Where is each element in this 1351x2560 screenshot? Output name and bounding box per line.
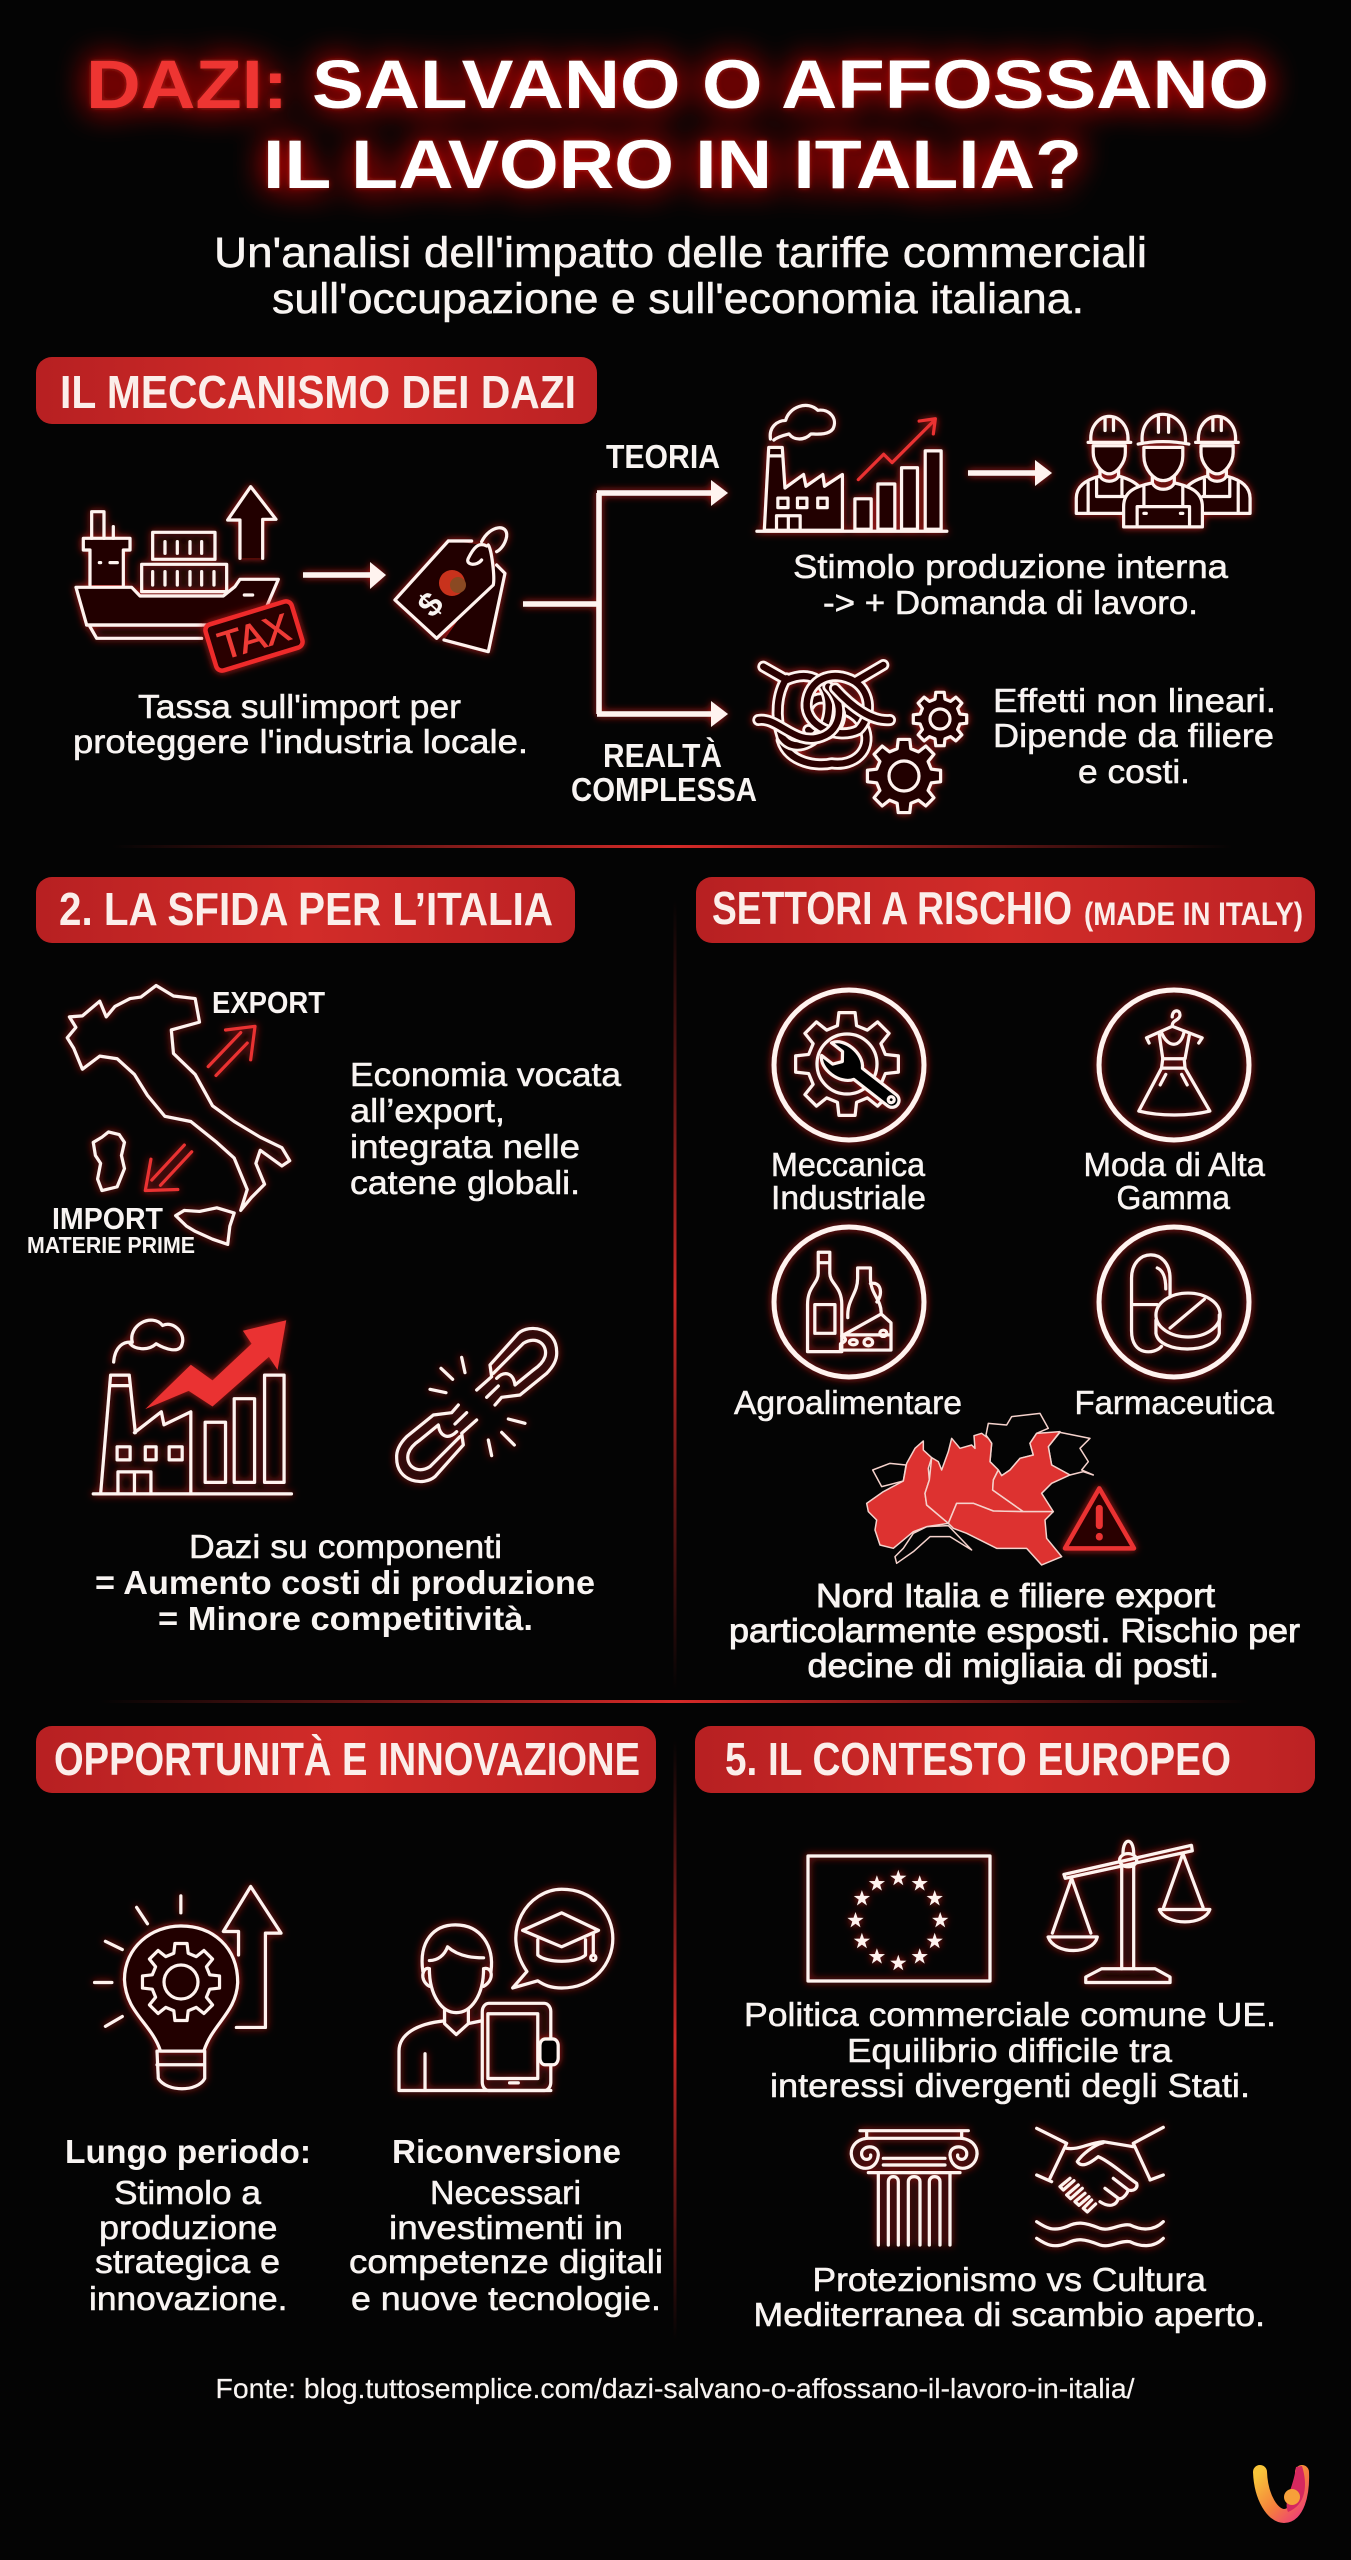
- text: economia vocata: integrata nelle: [350, 1128, 580, 1165]
- title: SALVANO O AFFOSSANO: [312, 46, 1269, 123]
- text: dazi su componenti: [95, 1528, 595, 1637]
- logo: [1260, 2466, 1305, 2516]
- icon: greek column: [851, 2131, 977, 2245]
- label: realtà complessa: REALTÀ: [603, 737, 722, 774]
- label: import materie prime: MATERIE PRIME: [27, 1232, 195, 1258]
- text: dazi su componenti: = Minore competitività.: [158, 1600, 533, 1637]
- icon: tax stamp: TAX: [213, 606, 296, 669]
- icon: balance scale: [1048, 1841, 1210, 1982]
- icon: pills: [1099, 1227, 1249, 1377]
- text: economia vocata: all’export,: [350, 1092, 505, 1129]
- map: northern italy regions: [867, 1413, 1093, 1565]
- label: meccanica industriale: [771, 1146, 926, 1216]
- icon: warning triangle: [1065, 1488, 1134, 1548]
- heading: opportunità e innovazione: OPPORTUNITÀ E INNOVAZIONE: [54, 1733, 640, 1785]
- text: economia vocata: Economia vocata: [350, 1056, 622, 1093]
- label: moda di alta gamma: Gamma: [1116, 1179, 1231, 1216]
- title: DAZI:: [86, 46, 288, 123]
- icon: broken chain: [397, 1328, 557, 1482]
- subtitle: Un'analisi dell'impatto delle tariffe commerciali: [214, 229, 1147, 277]
- text: stimolo produzione: -> + Domanda di lavoro.: [823, 584, 1198, 621]
- label: realtà complessa: COMPLESSA: [571, 771, 757, 808]
- text: lungo periodo: Lungo periodo:: [65, 2133, 311, 2170]
- text: protezionismo: Protezionismo vs Cultura: [812, 2261, 1207, 2298]
- text: riconversione: Riconversione: [392, 2133, 621, 2170]
- label: meccanica industriale: Meccanica: [771, 1146, 926, 1183]
- arrow: factory to workers: [968, 460, 1052, 486]
- heading: il meccanismo dei dazi: [36, 357, 597, 424]
- icon: factory with red arrow: [93, 1320, 291, 1494]
- heading: settori a rischio: [696, 877, 1315, 943]
- text: lungo periodo: produzione: [99, 2209, 278, 2246]
- panel: opportunità e innovazione: [36, 1726, 663, 2317]
- icon: light bulb with gear and arrow: [95, 1886, 281, 2089]
- text: effetti non lineari: Dipende da filiere: [993, 717, 1274, 754]
- text: lungo periodo: strategica e: [95, 2243, 280, 2280]
- title: IL LAVORO IN ITALIA?: [263, 126, 1082, 203]
- heading: la sfida per l'italia: 2. LA SFIDA PER L’ITALIA: [59, 883, 553, 935]
- text: protezionismo: Mediterranea di scambio aperto.: [754, 2296, 1265, 2333]
- icon: cargo ship: [76, 487, 278, 638]
- panel: il contesto europeo: [695, 1726, 1315, 2333]
- text: nord italia: [729, 1577, 1300, 1684]
- label: realtà complessa: [571, 737, 757, 808]
- text: riconversione: [349, 2133, 663, 2317]
- title: [86, 46, 1269, 203]
- heading: il contesto europeo: 5. IL CONTESTO EUROPEO: [725, 1733, 1231, 1785]
- map: italy outline: [67, 986, 290, 1244]
- text: lungo periodo: [65, 2133, 311, 2317]
- arrow: ship to tag: [303, 562, 386, 589]
- text: politica commerciale: Equilibrio difficile tra: [847, 2032, 1173, 2069]
- panel: il meccanismo dei dazi: [36, 357, 1276, 813]
- text: protezionismo: [754, 2261, 1265, 2333]
- icon: person with tablet and graduation cap: [399, 1889, 613, 2091]
- text: stimolo produzione: Stimolo produzione interna: [793, 548, 1229, 585]
- text: politica commerciale: [744, 1996, 1276, 2104]
- text: lungo periodo: innovazione.: [89, 2280, 288, 2317]
- heading: opportunità e innovazione: [36, 1726, 656, 1793]
- panel: la sfida per l'italia: [27, 877, 622, 1637]
- text: tassa sull'import: Tassa sull'import per: [138, 688, 461, 725]
- text: effetti non lineari: Effetti non lineari.: [993, 682, 1276, 719]
- text: lungo periodo: Stimolo a: [114, 2174, 262, 2211]
- text: riconversione: e nuove tecnologie.: [351, 2280, 661, 2317]
- label: agroalimentare: Agroalimentare: [734, 1384, 962, 1421]
- text: riconversione: investimenti in: [389, 2209, 623, 2246]
- text: riconversione: competenze digitali: [349, 2243, 663, 2280]
- icon: handshake over waves: [1037, 2127, 1163, 2246]
- label: farmaceutica: Farmaceutica: [1074, 1384, 1275, 1421]
- subtitle: sull'occupazione e sull'economia italiana.: [272, 275, 1084, 323]
- text: tassa sull'import: proteggere l'industria locale.: [73, 723, 528, 760]
- text: effetti non lineari: e costi.: [1078, 753, 1190, 790]
- label: moda di alta gamma: [1084, 1146, 1266, 1216]
- label: moda di alta gamma: Moda di Alta: [1084, 1146, 1266, 1183]
- text: economia vocata: catene globali.: [350, 1164, 580, 1201]
- text: nord italia: particolarmente esposti. Rischio per: [729, 1612, 1300, 1649]
- heading: il meccanismo dei dazi: IL MECCANISMO DEI DAZI: [60, 366, 576, 418]
- text: tassa sull'import: [73, 688, 528, 760]
- text: nord italia: decine di migliaia di posti.: [808, 1647, 1219, 1684]
- branching connector: [523, 480, 728, 727]
- subtitle: [214, 229, 1147, 323]
- heading: settori a rischio: SETTORI A RISCHIO: [712, 882, 1072, 934]
- icon: factory with rising line: [757, 405, 947, 531]
- source line: Fonte: blog.tuttosemplice.com/dazi-salvano-o-affossano-il-lavoro-in-italia/: [216, 2373, 1135, 2404]
- text: dazi su componenti: Dazi su componenti: [189, 1528, 502, 1565]
- icon: eu flag: [808, 1856, 990, 1981]
- icon: workers: [1076, 414, 1250, 527]
- icon: price tag: [395, 528, 507, 652]
- icon: price tag: $: [410, 585, 451, 624]
- text: economia vocata: [350, 1056, 622, 1201]
- text: stimolo produzione: [793, 548, 1229, 621]
- label: import materie prime: [27, 1201, 195, 1258]
- icon: tangled knot and gears: [758, 665, 967, 813]
- icon: wine, oil and cheese: [774, 1227, 924, 1377]
- text: effetti non lineari: [993, 682, 1276, 790]
- text: politica commerciale: interessi divergenti degli Stati.: [770, 2067, 1250, 2104]
- text: dazi su componenti: = Aumento costi di produzione: [95, 1564, 595, 1601]
- icon: dress: [1099, 990, 1249, 1140]
- panel: settori a rischio: [696, 877, 1315, 1684]
- heading: settori a rischio: (MADE IN ITALY): [1084, 896, 1303, 932]
- icon: gear and wrench: [774, 990, 924, 1140]
- text: riconversione: Necessari: [430, 2174, 581, 2211]
- label: import materie prime: IMPORT: [52, 1201, 163, 1236]
- label: export: EXPORT: [212, 985, 325, 1020]
- text: politica commerciale: Politica commerciale comune UE.: [744, 1996, 1276, 2033]
- label: meccanica industriale: Industriale: [771, 1179, 926, 1216]
- text: nord italia: Nord Italia e filiere export: [816, 1577, 1215, 1614]
- label: teoria: TEORIA: [606, 438, 720, 475]
